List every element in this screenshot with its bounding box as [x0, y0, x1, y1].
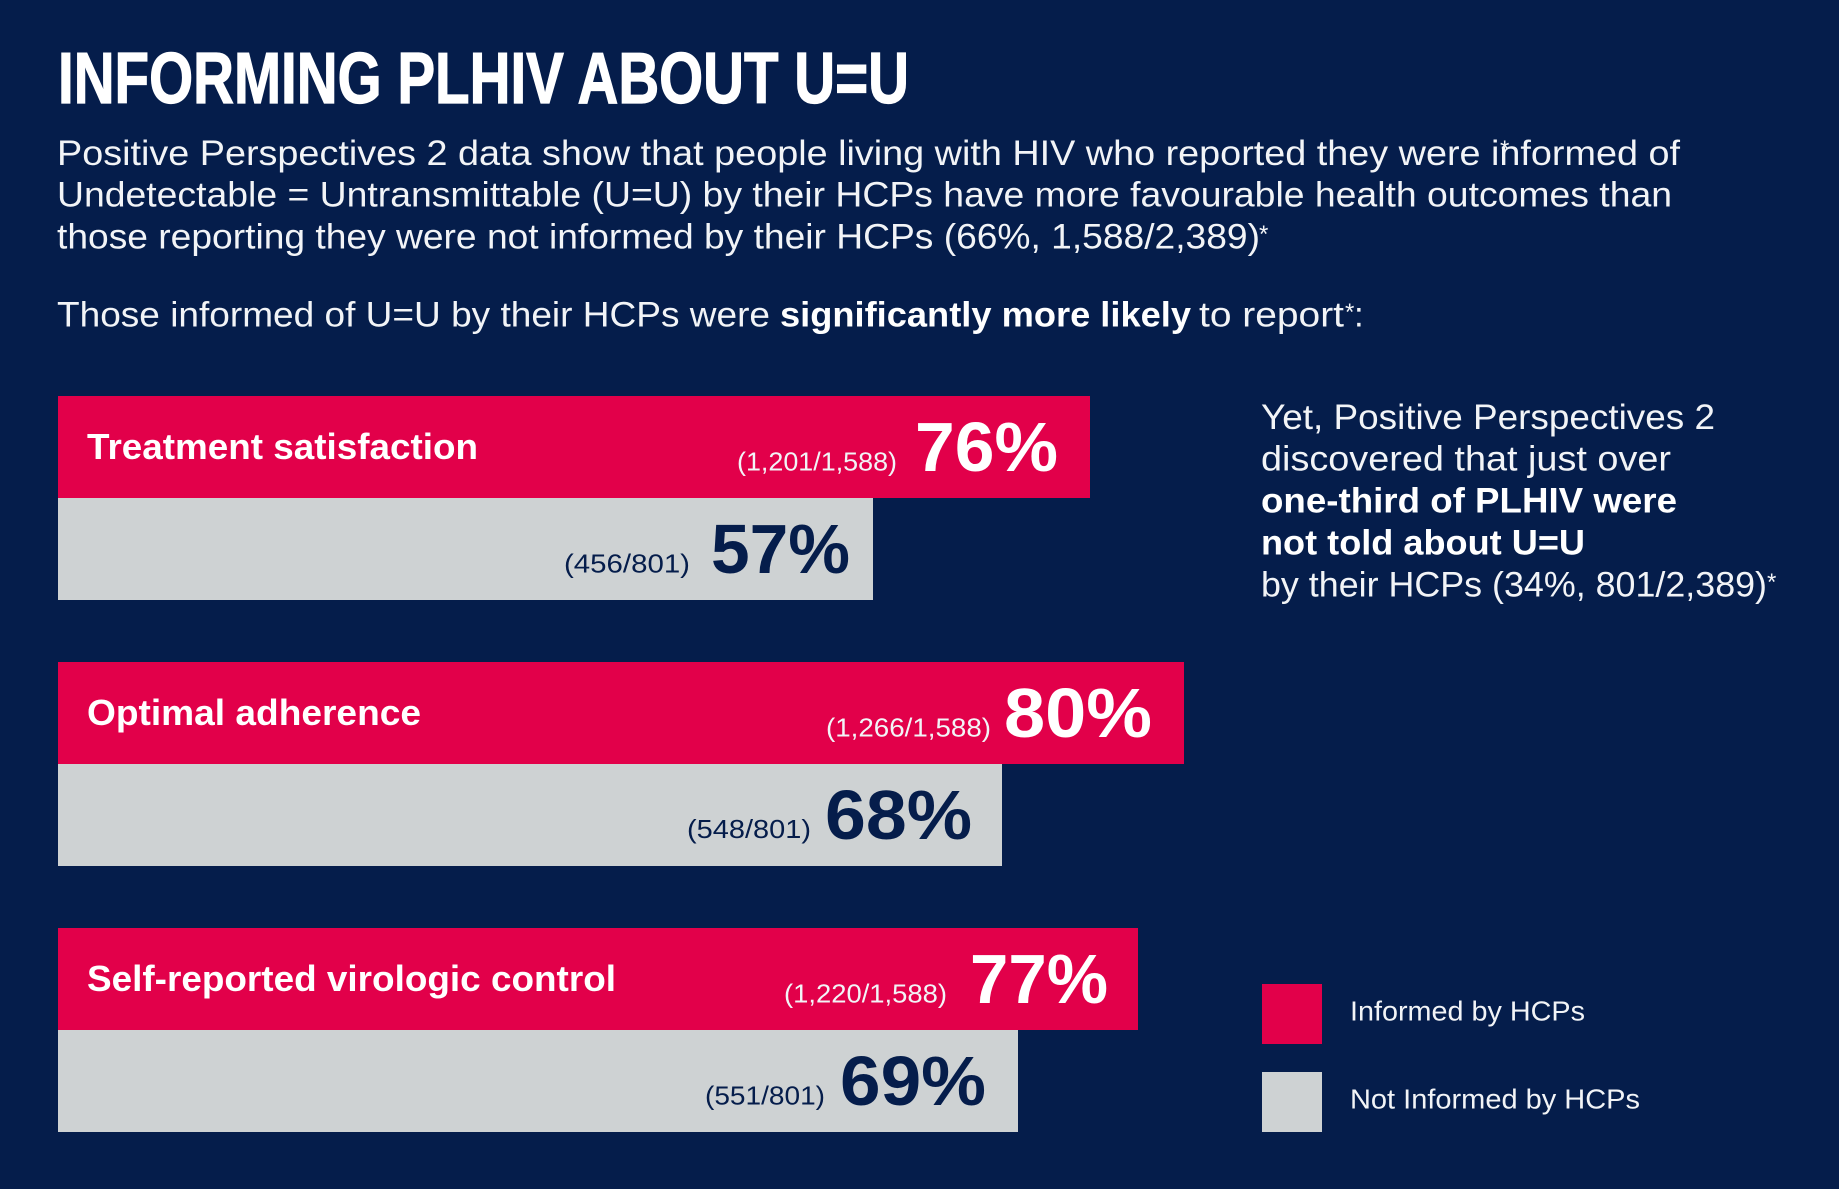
callout: one-third of PLHIV not told: not told about U=U — [1261, 524, 1585, 562]
bar: treatment satisfaction, informed: Treatment satisfaction — [87, 426, 478, 467]
legend — [1262, 984, 1640, 1132]
group: self-reported virologic control — [58, 928, 1138, 1132]
bar: virologic control, not informed: 69% — [840, 1042, 986, 1120]
intro text block: Positive Perspectives 2 data show that people living with HIV who reported they were informed of — [57, 134, 1680, 173]
bar: optimal adherence, not informed — [58, 764, 1002, 866]
bar: treatment satisfaction, informed — [58, 396, 1090, 498]
intro text block: * — [1500, 136, 1509, 163]
intro text block: Undetectable = Untransmittable (U=U) by their HCPs have more favourable health outcomes than — [57, 176, 1672, 214]
group: treatment satisfaction — [58, 396, 1090, 600]
bar: virologic control, informed: (1,220/1,588) — [784, 978, 947, 1008]
lead-in sentence: to report — [1199, 296, 1344, 334]
callout: one-third of PLHIV not told: discovered that just over — [1261, 440, 1671, 478]
bar: treatment satisfaction, informed: 76% — [915, 408, 1058, 486]
bar: virologic control, informed: Self-reported virologic control — [87, 958, 616, 999]
legend item: informed by HCPs: Informed by HCPs — [1350, 996, 1585, 1026]
title: INFORMING PLHIV ABOUT U=U — [58, 39, 909, 119]
callout: one-third of PLHIV not told: Yet, Positive Perspectives 2 — [1261, 398, 1715, 437]
bar: optimal adherence, informed: Optimal adherence — [87, 692, 421, 733]
callout: one-third of PLHIV not told — [1261, 398, 1776, 604]
bar: treatment satisfaction, not informed: (456/801) — [564, 548, 690, 578]
lead-in sentence: Those informed of U=U by their HCPs were — [57, 296, 770, 334]
intro text block — [57, 134, 1680, 256]
legend item: not informed by HCPs — [1262, 1072, 1640, 1132]
lead-in sentence: significantly more likely — [780, 296, 1192, 334]
lead-in sentence — [57, 296, 1364, 334]
bar: virologic control, not informed — [58, 1030, 1018, 1132]
callout: one-third of PLHIV not told: one-third of PLHIV were — [1261, 482, 1677, 520]
bar: virologic control, informed — [58, 928, 1138, 1030]
callout: one-third of PLHIV not told: by their HCPs (34%, 801/2,389) — [1261, 566, 1767, 604]
legend item: not informed by HCPs: Not Informed by HCPs — [1350, 1084, 1640, 1114]
bar: optimal adherence, not informed: 68% — [825, 776, 972, 854]
intro text block: those reporting they were not informed by their HCPs (66%, 1,588/2,389) — [57, 218, 1260, 256]
bar: optimal adherence, informed — [58, 662, 1184, 764]
bar: virologic control, not informed: (551/801) — [705, 1080, 825, 1110]
group: optimal adherence — [58, 662, 1184, 866]
bar: virologic control, informed: 77% — [970, 940, 1108, 1018]
bar chart — [58, 396, 1184, 1132]
lead-in sentence: : — [1354, 296, 1364, 334]
legend item: informed by HCPs — [1262, 984, 1585, 1044]
bar: treatment satisfaction, informed: (1,201/1,588) — [737, 446, 897, 476]
bar: treatment satisfaction, not informed — [58, 498, 873, 600]
intro text block: * — [1259, 221, 1268, 248]
callout: one-third of PLHIV not told: * — [1767, 569, 1776, 596]
bar: optimal adherence, not informed: (548/801) — [687, 814, 811, 844]
bar: treatment satisfaction, not informed: 57% — [711, 510, 850, 588]
lead-in sentence: * — [1345, 299, 1354, 326]
bar: optimal adherence, informed: (1,266/1,588) — [826, 712, 991, 742]
bar: optimal adherence, informed: 80% — [1004, 674, 1152, 752]
